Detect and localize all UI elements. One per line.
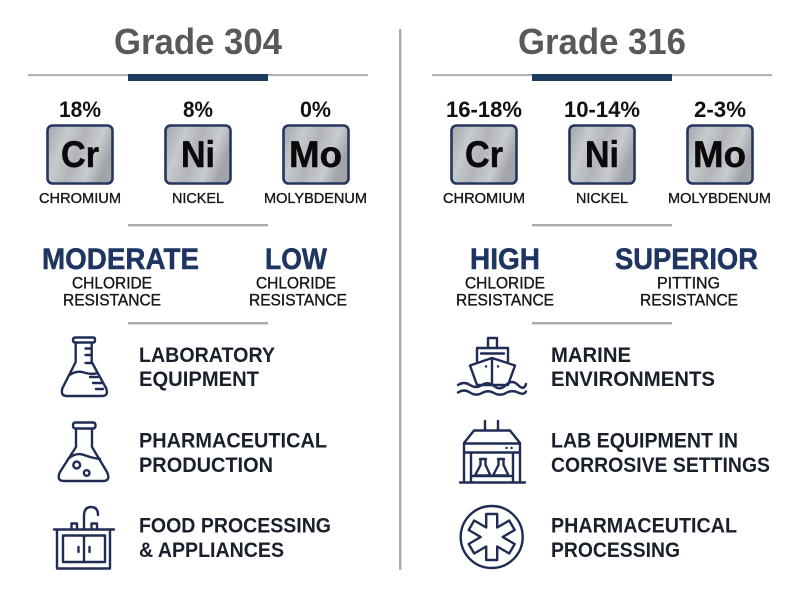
element: chromium: CHROMIUM [39, 190, 121, 207]
element: chromium: Cr [465, 134, 503, 175]
element: molybdenum: Mo [693, 134, 746, 175]
stat: high chloride resistance [456, 243, 554, 310]
stat: low chloride resistance: CHLORIDE [256, 274, 336, 292]
stat: superior pitting resistance: PITTING [657, 274, 720, 292]
element: nickel: 8% [183, 97, 213, 122]
element: chromium: 18% [59, 97, 101, 122]
icon: ship on waves [458, 338, 526, 395]
stat: low chloride resistance [249, 243, 347, 310]
element: molybdenum: MOLYBDENUM [264, 190, 367, 207]
stat: moderate chloride resistance: MODERATE [42, 243, 199, 276]
text: pharmaceutical production: PRODUCTION [139, 454, 273, 477]
element: molybdenum: 2-3% [694, 97, 746, 122]
stat: low chloride resistance: LOW [265, 243, 328, 276]
element: chromium [39, 97, 121, 207]
panel: Grade 316 [432, 21, 772, 568]
text: laboratory equipment [139, 344, 275, 391]
text: lab equipment in corrosive settings: CORROSIVE SETTINGS [551, 454, 770, 477]
text: marine environments: ENVIRONMENTS [551, 368, 715, 391]
icon: kitchen sink cabinet [54, 507, 114, 568]
icon: circled asterisk [461, 506, 523, 568]
text: pharmaceutical processing: PHARMACEUTICAL [551, 514, 737, 538]
text: pharmaceutical production [139, 430, 327, 477]
text: marine environments: MARINE [551, 344, 631, 367]
stat: moderate chloride resistance: RESISTANCE [63, 292, 161, 310]
heading rule [28, 74, 368, 81]
stat: superior pitting resistance: SUPERIOR [615, 243, 758, 276]
stat: high chloride resistance: RESISTANCE [456, 292, 554, 310]
title: Grade 316: Grade 316 [518, 21, 686, 62]
text: food processing and appliances [139, 514, 331, 562]
element: molybdenum [668, 97, 771, 207]
text: food processing and appliances: FOOD PROCESSING [139, 514, 331, 538]
stat: superior pitting resistance: RESISTANCE [640, 292, 738, 310]
stat: high chloride resistance: CHLORIDE [465, 274, 545, 292]
icon: flask with bubbles [59, 422, 108, 481]
element: nickel: Ni [585, 134, 619, 175]
stat: high chloride resistance: HIGH [470, 243, 540, 276]
element: nickel [166, 97, 230, 207]
element: chromium: Cr [61, 134, 99, 175]
text: laboratory equipment: EQUIPMENT [139, 368, 259, 391]
element: molybdenum: 0% [300, 97, 331, 122]
element: nickel: Ni [181, 134, 215, 175]
icon: fume hood with flasks [460, 421, 525, 482]
text: pharmaceutical processing [551, 514, 737, 562]
stat: moderate chloride resistance [42, 243, 199, 310]
element: molybdenum: Mo [289, 134, 342, 175]
text: pharmaceutical production: PHARMACEUTICAL [139, 430, 327, 452]
element: chromium [443, 97, 525, 207]
text: pharmaceutical processing: PROCESSING [551, 539, 680, 562]
icon: graduated flask [62, 338, 107, 396]
element: chromium: CHROMIUM [443, 190, 525, 207]
title: Grade 304: Grade 304 [114, 21, 282, 62]
element: nickel: NICKEL [576, 190, 628, 207]
stat: low chloride resistance: RESISTANCE [249, 292, 347, 310]
element: nickel: 10-14% [564, 97, 640, 122]
stat: superior pitting resistance [615, 243, 758, 310]
panel: Grade 304 [28, 21, 368, 568]
element: molybdenum: MOLYBDENUM [668, 190, 771, 207]
text: lab equipment in corrosive settings: LAB EQUIPMENT IN [551, 430, 738, 452]
text: marine environments [551, 344, 715, 391]
element: nickel [564, 97, 640, 207]
text: lab equipment in corrosive settings [551, 430, 770, 477]
heading rule [432, 74, 772, 81]
element: molybdenum [264, 97, 367, 207]
stat: moderate chloride resistance: CHLORIDE [72, 274, 152, 292]
element: chromium: 16-18% [446, 97, 522, 122]
element: nickel: NICKEL [172, 190, 224, 207]
text: food processing and appliances: & APPLIANCES [139, 539, 284, 562]
text: laboratory equipment: LABORATORY [139, 344, 275, 367]
